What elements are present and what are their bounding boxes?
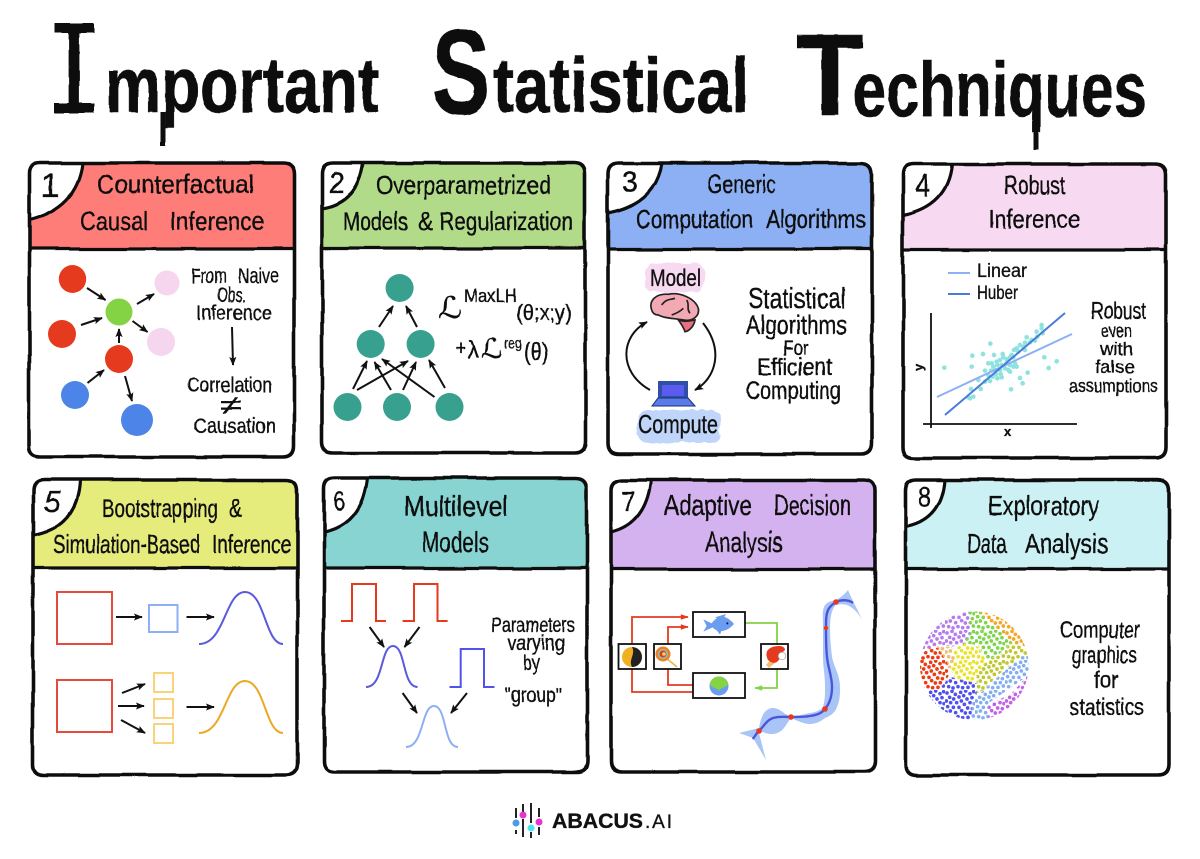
panel 4 number and heading: [915, 167, 1080, 234]
panel 8 number and heading: [918, 481, 1108, 559]
icon: lollipop: [656, 646, 677, 667]
label: compute: Compute: [638, 409, 718, 439]
panel 8 header: [906, 480, 1169, 775]
panel 7 number and heading: Analysis: [705, 527, 783, 559]
icon: fish: [703, 614, 734, 635]
statistical algorithms text: For: [783, 337, 809, 360]
panel 5 number and heading: 5: [44, 484, 62, 519]
correlation text: [187, 265, 279, 438]
panel 2 header: [322, 163, 585, 453]
loss formula: (θ;x;y): [516, 300, 572, 325]
statistical algorithms text: Algorithms: [746, 310, 847, 340]
panel 2 number and heading: Overparametrized: [376, 170, 551, 200]
title: tatistical: [493, 41, 749, 129]
legend: Huber: [977, 283, 1019, 304]
panel 1 number and heading: Counterfactual: [97, 169, 254, 199]
loss formula: (θ): [524, 339, 549, 366]
icon: ping pong paddle: [766, 646, 786, 667]
panel 2 number and heading: Regularization: [439, 206, 573, 236]
scatter chart: y: [911, 363, 926, 371]
panel 3 number and heading: Computation: [636, 204, 753, 234]
panel 2 number and heading: Models: [343, 206, 408, 236]
neural network: [334, 274, 464, 421]
hierarchy diagram: [341, 584, 494, 747]
panel 5 number and heading: Simulation-Based: [53, 529, 200, 559]
panel 4 number and heading: 4: [915, 167, 930, 205]
computer graphics text: [1060, 617, 1144, 721]
panel 6: multilevel models: [324, 478, 587, 772]
logo wordmark: ABACUS: [552, 810, 643, 833]
title: T: [796, 10, 864, 140]
panel 4 header: [903, 164, 1166, 458]
title: S: [432, 4, 490, 140]
panel 5 number and heading: &: [229, 493, 242, 523]
correlation text: Naive: [238, 265, 279, 288]
panel 8 number and heading: 8: [918, 481, 931, 512]
arrow: model to compute: [695, 323, 715, 390]
bootstrap row 1: [57, 592, 283, 644]
parameters text: varying: [507, 632, 565, 655]
panel 7 number and heading: 7: [621, 486, 636, 517]
panel 7: adaptive decision analysis: [611, 480, 875, 772]
panel 1: counterfactual causal inference: [29, 163, 294, 457]
panel 5 number and heading: Inference: [212, 529, 291, 559]
robust text: [1069, 298, 1158, 396]
panel 8 number and heading: Data: [967, 528, 1007, 559]
logo: abacus.ai: [512, 803, 672, 838]
scatter chart: x: [1004, 424, 1012, 439]
loss formula: reg: [504, 335, 522, 352]
panel 1 number and heading: 1: [41, 167, 59, 205]
panel 5 header: [33, 480, 297, 775]
loss formula: ℒ: [481, 334, 502, 365]
loss formula: +: [455, 338, 466, 360]
loss formula: ℒ: [438, 291, 462, 326]
panel 8 number and heading: Exploratory: [988, 490, 1099, 521]
statistical algorithms text: Statistical: [748, 283, 846, 315]
panel 4 number and heading: Inference: [988, 204, 1080, 234]
panel 2: overparametrized models: [322, 163, 585, 453]
panel 7 number and heading: Decision: [774, 490, 851, 522]
computer graphics text: graphics: [1072, 642, 1137, 669]
panel 5: bootstrapping: [33, 480, 297, 775]
panel 4 number and heading: Robust: [1004, 170, 1066, 200]
panel 8: exploratory data analysis: [906, 480, 1169, 775]
decision loop diagram: [618, 612, 788, 698]
panel 6 number and heading: Models: [422, 527, 489, 559]
title: mportant: [105, 41, 379, 129]
panel 3 header: [608, 163, 872, 454]
robust text: with: [1099, 339, 1133, 359]
parameters text: [491, 614, 575, 707]
title: [54, 1, 1147, 150]
panel 5 number and heading: Bootstrapping: [102, 493, 218, 523]
panel 3 number and heading: 3: [622, 164, 638, 199]
highlight: compute: [637, 410, 721, 443]
statistical algorithms text: Computing: [746, 377, 841, 405]
correlation text: Inference: [196, 302, 272, 325]
panel 6 number and heading: 6: [333, 486, 345, 516]
panel 3 number and heading: Generic: [707, 169, 776, 199]
robust text: false: [1095, 357, 1135, 377]
loss formula: λ: [468, 337, 479, 364]
legend: Linear: [977, 261, 1028, 282]
panel 4: robust inference: [903, 164, 1166, 458]
panel 2 number and heading: &: [418, 206, 433, 236]
panel 1 number and heading: [41, 167, 264, 236]
robust text: Robust: [1091, 298, 1146, 325]
causal graph: [48, 265, 180, 436]
gaussian process curve: [739, 590, 862, 760]
panel 3 number and heading: [622, 164, 866, 234]
robust text: assumptions: [1069, 376, 1158, 396]
panel 3 number and heading: Algorithms: [766, 204, 866, 234]
correlation text: From: [191, 265, 227, 288]
statistical algorithms text: [746, 283, 847, 405]
highlight: model: [645, 263, 704, 292]
panel 5 number and heading: [44, 484, 291, 559]
correlation text: ≠: [220, 390, 242, 420]
loss formula: MaxLH: [464, 286, 517, 306]
icon: laptop: [652, 381, 695, 406]
panel 7 number and heading: Adaptive: [664, 490, 752, 522]
arrow: compute to model: [626, 322, 650, 390]
parameters text: "group": [505, 684, 562, 707]
loss formula: [438, 286, 572, 366]
icon: earth: [710, 676, 728, 696]
panel 1 header: [29, 163, 294, 457]
panel 7 number and heading: [621, 486, 851, 559]
bootstrap row 2: [57, 673, 283, 743]
scatter chart: [911, 313, 1077, 439]
panel 1 number and heading: Causal: [80, 206, 148, 236]
title: I: [64, 1, 84, 139]
panel 6 header: [324, 478, 587, 772]
panel 6 number and heading: Multilevel: [404, 491, 508, 523]
correlation text: Correlation: [187, 374, 272, 397]
legend: [948, 261, 1028, 304]
panel 6 number and heading: [333, 486, 508, 559]
icon: brain: [651, 294, 699, 332]
computer graphics text: Computer: [1060, 617, 1140, 644]
correlation text: Causation: [194, 415, 276, 438]
panel 2 number and heading: [329, 165, 573, 236]
robust text: even: [1101, 321, 1132, 341]
panel 7 header: [611, 480, 875, 772]
parameters text: Parameters: [491, 614, 575, 637]
panel 2 number and heading: 2: [329, 165, 345, 200]
statistical algorithms text: Efficient: [757, 354, 832, 381]
logo icon: [512, 803, 542, 838]
icon: moon: [622, 647, 642, 667]
parameters text: by: [523, 652, 540, 675]
panel 1 number and heading: Inference: [170, 206, 264, 236]
panel 3: generic computation algorithms: [608, 163, 872, 454]
correlation text: Obs.: [217, 284, 246, 307]
cluster dot plot: [920, 611, 1029, 720]
logo wordmark: .AI: [645, 812, 672, 833]
label: model: Model: [650, 265, 701, 292]
computer graphics text: for: [1094, 667, 1118, 694]
arrow: naive to correlation: [232, 327, 233, 365]
panel 8 number and heading: Analysis: [1025, 528, 1108, 559]
computer graphics text: statistics: [1070, 694, 1144, 721]
